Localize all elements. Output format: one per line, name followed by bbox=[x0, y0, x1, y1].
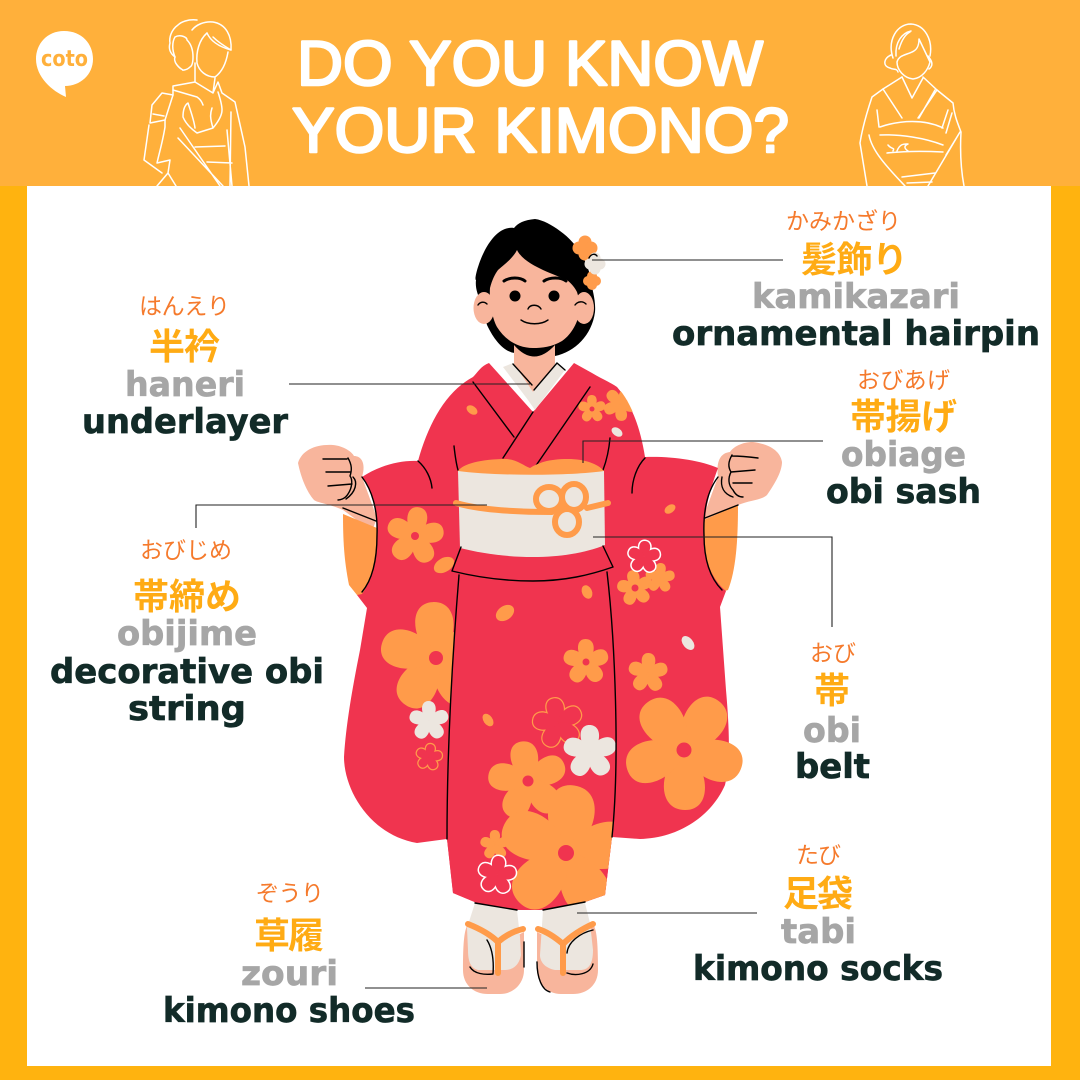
label: obiage bbox=[826, 367, 981, 512]
kimono body and sleeves bbox=[344, 363, 729, 910]
label: haneri: haneri bbox=[125, 365, 245, 405]
icon: line drawing of woman in kimono, right bbox=[860, 24, 964, 186]
leader line: kamikazari bbox=[592, 259, 783, 261]
label: obiage: obi sash bbox=[826, 472, 981, 512]
obijime knot bbox=[456, 484, 608, 535]
label: zouri bbox=[163, 880, 415, 1031]
leader line: obi bbox=[593, 537, 832, 627]
label: tabi: kimono socks bbox=[693, 949, 943, 989]
leader line: obijime bbox=[196, 505, 487, 528]
label: kamikazari bbox=[672, 208, 1040, 354]
title: YOUR KIMONO? bbox=[292, 96, 789, 166]
outlined skirt flowers bbox=[474, 694, 618, 897]
kimono seams bbox=[323, 363, 758, 592]
socks bbox=[467, 903, 593, 970]
label: kamikazari: ornamental hairpin bbox=[672, 314, 1040, 354]
zouri sandals bbox=[463, 926, 598, 994]
white content panel bbox=[27, 186, 1051, 1066]
label: obi: おび bbox=[810, 640, 856, 666]
label: obi: 帯 bbox=[814, 670, 850, 711]
label: obijime: obijime bbox=[117, 614, 257, 654]
label: obi: belt bbox=[795, 747, 870, 787]
kimono figure illustration bbox=[298, 219, 782, 994]
leader line: zouri bbox=[365, 987, 487, 989]
label: haneri: underlayer bbox=[82, 402, 288, 442]
label: zouri: 草履 bbox=[254, 915, 324, 956]
label: obijime: おびじめ bbox=[140, 537, 232, 563]
skirt flowers bbox=[480, 585, 613, 910]
label: kamikazari: かみかざり bbox=[786, 208, 901, 234]
hands bbox=[298, 442, 782, 531]
label: obiage: 帯揚げ bbox=[850, 396, 957, 437]
logo: coto speech bubble: coto bbox=[41, 47, 88, 72]
outlined sleeve flowers bbox=[413, 540, 662, 772]
label: obi bbox=[795, 640, 870, 787]
label: haneri: 半衿 bbox=[149, 326, 220, 367]
orange sleeve lining bbox=[343, 505, 738, 595]
leader line: haneri bbox=[289, 383, 530, 385]
zouri straps and outlines bbox=[468, 924, 593, 992]
hair ornament bbox=[572, 236, 606, 290]
label: zouri: ぞうり bbox=[256, 880, 324, 906]
face details bbox=[478, 278, 586, 324]
label: tabi: たび bbox=[796, 842, 841, 868]
logo: coto speech bubble bbox=[36, 31, 93, 97]
neck and collar bbox=[503, 345, 565, 410]
header band bbox=[0, 0, 1080, 186]
label: obijime: decorative obi bbox=[50, 652, 324, 692]
white sleeve flowers and petals bbox=[408, 425, 697, 741]
label: haneri: はんえり bbox=[139, 293, 230, 319]
label: kamikazari: kamikazari bbox=[752, 277, 960, 317]
label: zouri: zouri bbox=[241, 954, 338, 994]
label: obijime: string bbox=[128, 689, 246, 729]
obi belt bbox=[447, 459, 616, 910]
hair bbox=[475, 219, 595, 357]
label: tabi: 足袋 bbox=[783, 873, 853, 914]
title bbox=[292, 29, 789, 166]
label: haneri bbox=[82, 293, 288, 442]
label: obiage: おびあげ bbox=[857, 367, 950, 393]
label: tabi: tabi bbox=[781, 912, 856, 952]
icon: line drawing of woman in kimono, left bbox=[144, 20, 249, 186]
label: kamikazari: 髪飾り bbox=[801, 239, 908, 280]
title: DO YOU KNOW bbox=[297, 29, 764, 99]
label: obiage: obiage bbox=[841, 435, 966, 475]
label: obijime bbox=[50, 537, 324, 729]
leader line: obiage bbox=[583, 441, 823, 463]
skirt panel bbox=[447, 572, 617, 910]
label: tabi bbox=[693, 842, 943, 989]
label: zouri: kimono shoes bbox=[163, 991, 415, 1031]
label: obi: obi bbox=[803, 711, 861, 751]
label: obijime: 帯締め bbox=[133, 576, 241, 617]
face and ears bbox=[474, 250, 594, 348]
leader line: tabi bbox=[577, 912, 757, 914]
sleeve flowers bbox=[375, 380, 770, 836]
